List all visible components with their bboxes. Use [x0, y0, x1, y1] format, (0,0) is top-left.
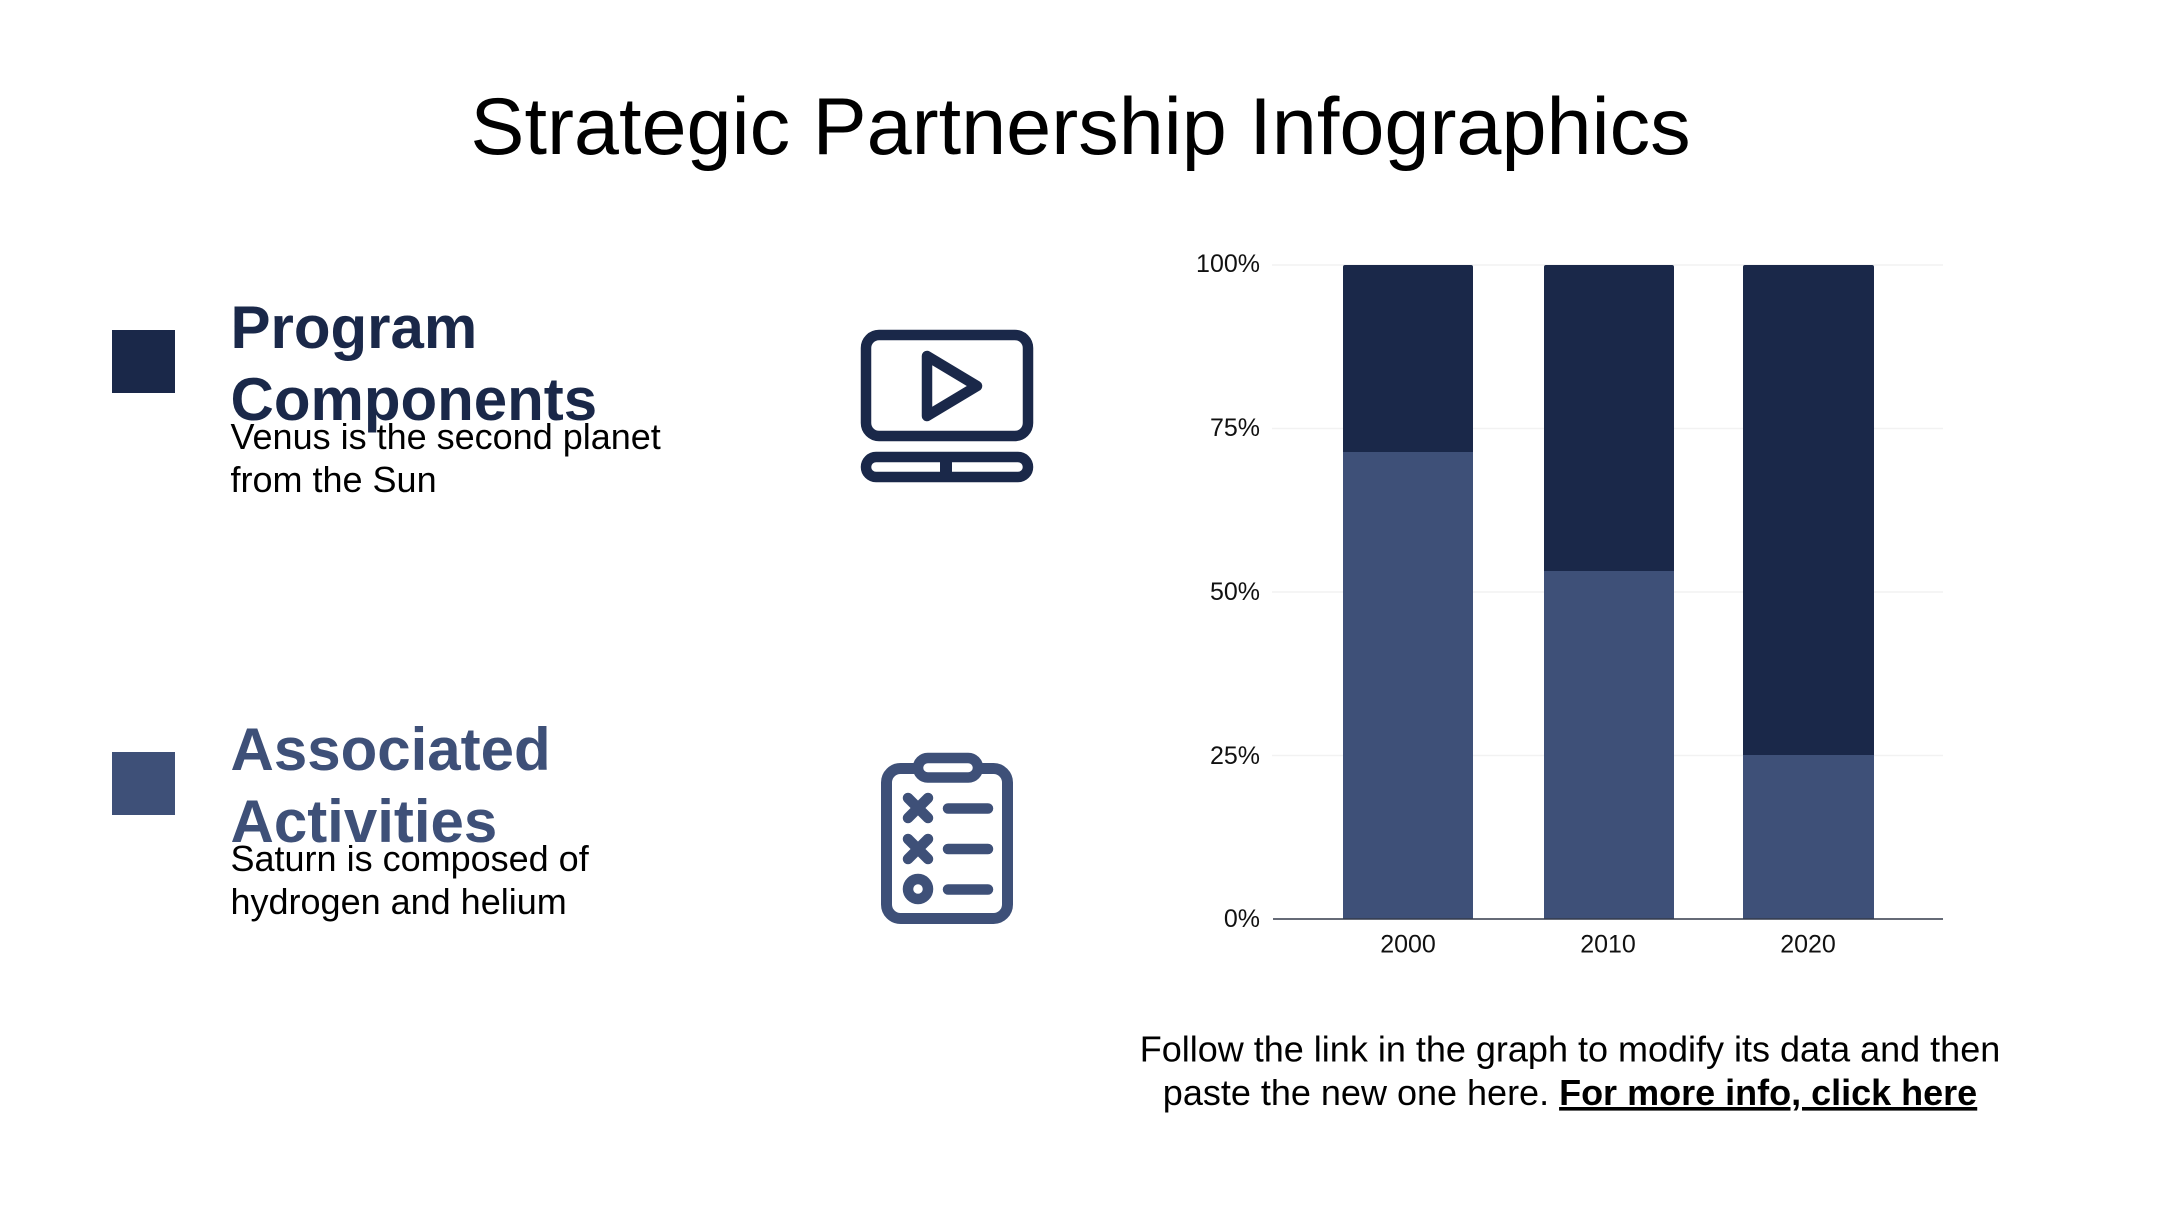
y axis labels — [1196, 250, 1260, 933]
bar 2020 — [1743, 265, 1874, 919]
x axis labels — [1380, 930, 1836, 958]
footer note with link: paste the new one here. — [1163, 1072, 1559, 1113]
heading: program components: Program — [230, 294, 477, 361]
y axis labels: 75% — [1210, 414, 1260, 442]
text: saturn description: hydrogen and helium — [230, 881, 567, 922]
y axis labels: 100% — [1196, 250, 1260, 278]
x axis labels: 2000 — [1380, 930, 1436, 958]
bar 2000 — [1343, 265, 1473, 919]
footer note with link: Follow the link in the graph to modify its data and then — [1140, 1028, 2000, 1070]
heading: associated activities: Associated — [230, 716, 551, 783]
panel: program components — [112, 294, 1028, 500]
heading: associated activities: Activities — [230, 788, 497, 855]
grid lines — [1272, 265, 1943, 756]
footer note with link: For more info, click here — [1559, 1072, 1977, 1113]
x axis labels: 2020 — [1780, 930, 1836, 958]
legend square: associated activities — [112, 752, 175, 815]
x axis labels: 2010 — [1580, 930, 1636, 958]
title: Strategic Partnership Infographics — [470, 82, 1691, 172]
x axis line — [1273, 918, 1943, 920]
y axis labels: 0% — [1224, 905, 1260, 933]
text: venus description: Venus is the second planet — [230, 416, 661, 457]
icon: clipboard checklist — [886, 758, 1008, 918]
text: saturn description: Saturn is composed of — [230, 838, 590, 879]
legend square: program components — [112, 330, 175, 393]
text: venus description: from the Sun — [230, 459, 437, 500]
bar 2010 — [1544, 265, 1674, 919]
icon: video player monitor — [866, 335, 1028, 477]
y axis labels: 25% — [1210, 742, 1260, 770]
y axis labels: 50% — [1210, 578, 1260, 606]
stacked bar chart — [1196, 250, 1943, 958]
panel: associated activities — [112, 716, 1008, 922]
heading: program components: Components — [230, 366, 597, 433]
